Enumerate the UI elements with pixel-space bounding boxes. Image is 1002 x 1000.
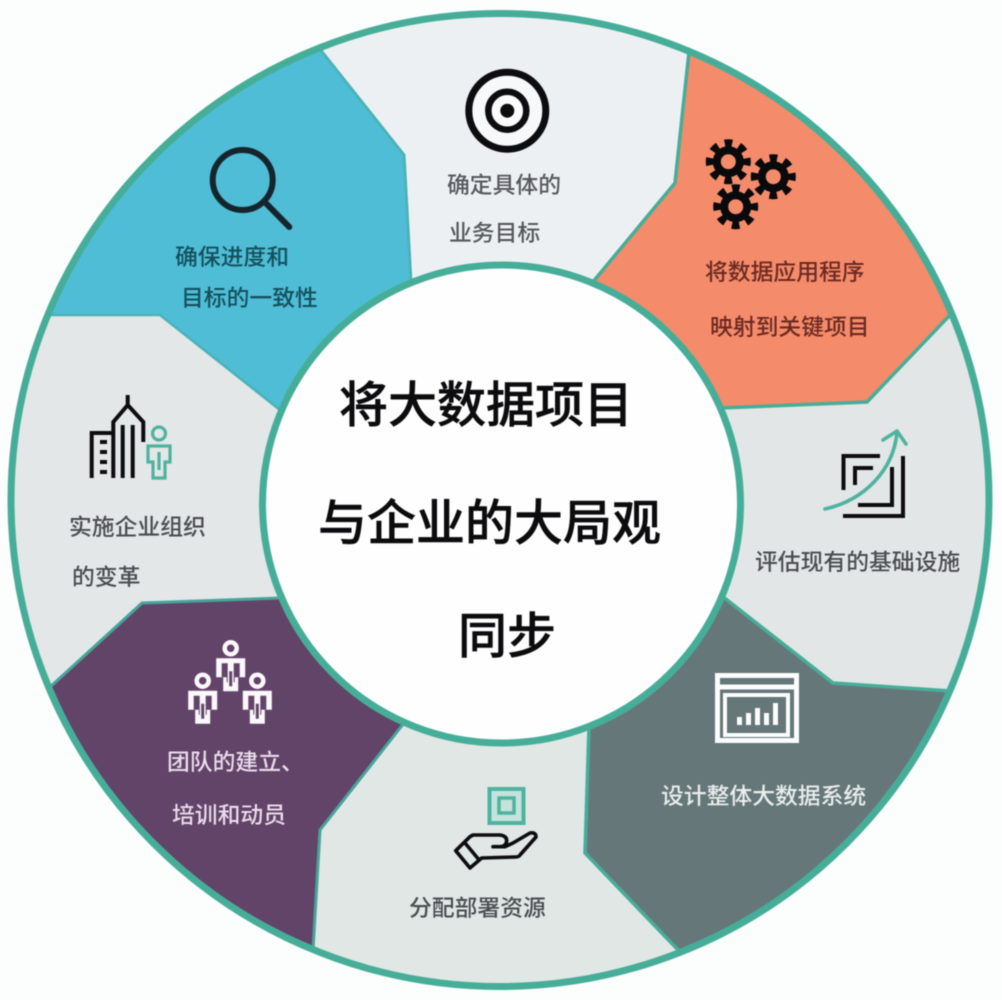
icon: dashboard window with bars [718,676,796,740]
icon: growth arrow over squares [825,431,906,516]
text: data applications label: 映射到关键项目 [710,314,870,340]
text: organizational change label: 实施企业组织 [69,514,206,540]
title: 同步 [458,610,556,664]
panel: allocate deployment resources [313,723,680,987]
text: define goals label: 确定具体的 [447,172,561,198]
icon: three gears [710,143,792,225]
text: alignment label: 目标的一致性 [181,285,318,311]
icon: magnifying glass [213,150,289,227]
text: define goals label: 业务目标 [449,220,540,246]
text: infrastructure label: 评估现有的基础设施 [755,549,960,575]
panel: assess existing infrastructure [721,314,989,691]
center circle [262,265,740,743]
icon: hand holding square [456,787,536,868]
text: organizational change label: 的变革 [72,564,140,590]
title: 将大数据项目 [339,379,633,433]
panel: design big data system [585,596,950,952]
panel: define specific business goals [319,14,689,283]
panel: implement organizational change [11,315,281,688]
panel: team building, training and mobilization [49,598,404,950]
text: alignment label: 确保进度和 [175,244,289,270]
text: team label: 培训和动员 [172,802,286,828]
icon: target [469,72,546,149]
text: resources label: 分配部署资源 [409,895,546,921]
panel: ensure progress aligned with goals [48,48,411,410]
text: system design label: 设计整体大数据系统 [661,783,866,809]
panel: map data applications to key projects [592,52,951,408]
icon: city building and person [92,395,170,478]
text: data applications label: 将数据应用程序 [705,259,865,285]
title: 与企业的大局观 [318,497,661,551]
icon: three people [188,642,272,724]
text: team label: 团队的建立、 [167,749,304,775]
